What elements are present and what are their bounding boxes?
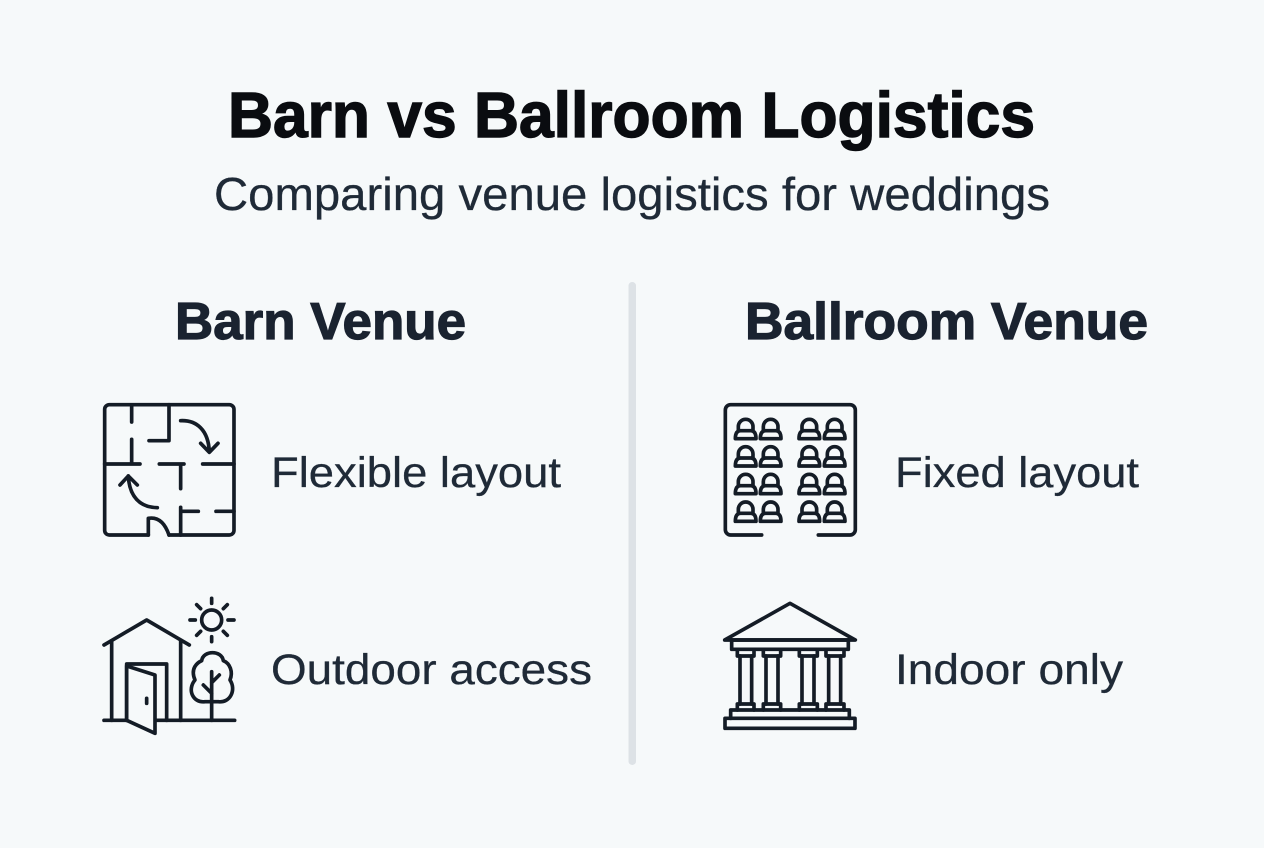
- title: Barn vs Ballroom Logistics: [228, 79, 1035, 151]
- heading: barn venue: Barn Venue: [175, 293, 466, 351]
- label: flexible layout: Flexible layout: [271, 449, 561, 497]
- icon: barn with open door, sun and tree: [104, 598, 235, 733]
- icon: fixed seating plan: [725, 405, 855, 535]
- divider between columns: [628, 282, 636, 765]
- label: indoor only: Indoor only: [895, 646, 1124, 694]
- icon: classical ballroom building: [725, 603, 855, 728]
- panel: barn venue: [104, 293, 592, 733]
- panel: ballroom venue: [725, 293, 1148, 728]
- subtitle: Comparing venue logistics for weddings: [214, 168, 1050, 220]
- icon: flexible floor plan: [105, 405, 234, 535]
- label: fixed layout: Fixed layout: [895, 449, 1139, 497]
- label: outdoor access: Outdoor access: [271, 646, 592, 694]
- heading: ballroom venue: Ballroom Venue: [745, 293, 1148, 351]
